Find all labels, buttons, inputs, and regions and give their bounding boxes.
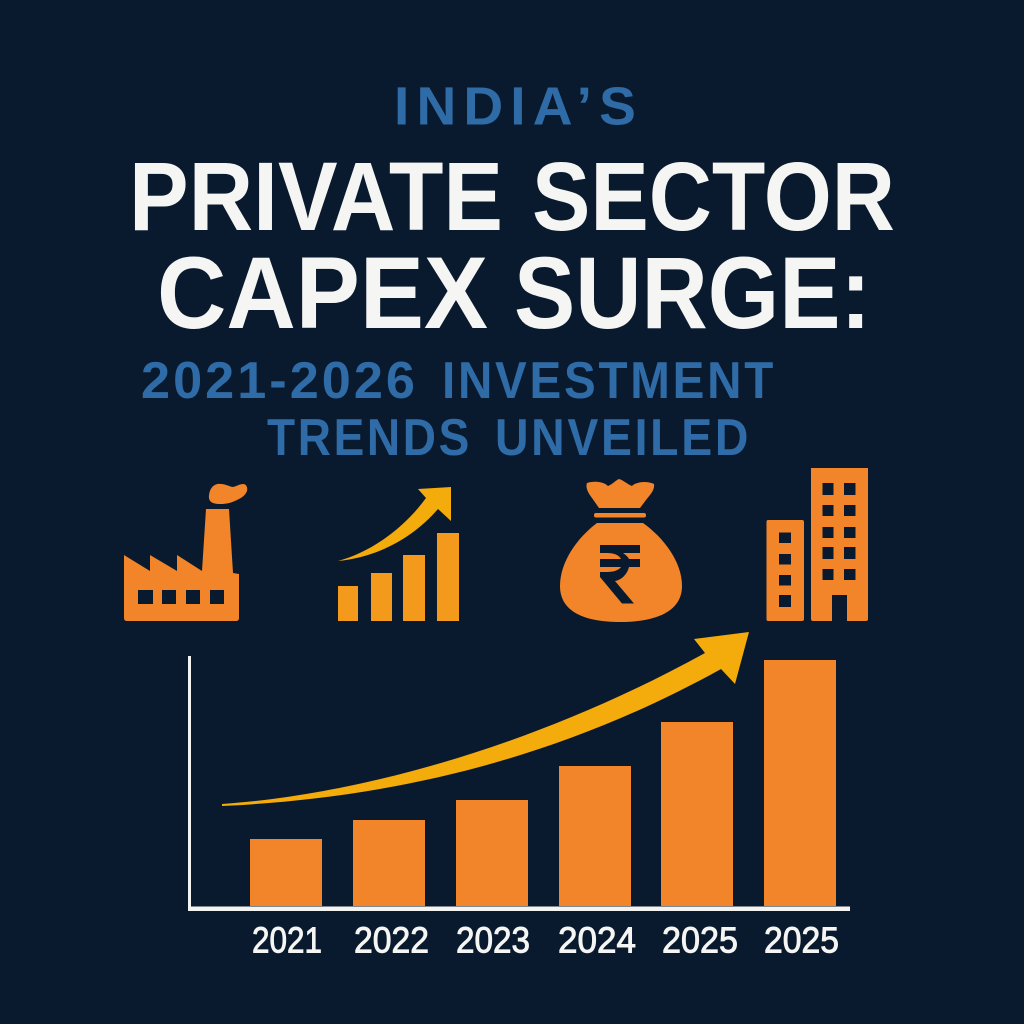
- heading line 2: CAPEX: [157, 236, 488, 350]
- kicker: India's: INDIA’S: [394, 76, 643, 136]
- heading line 2: [157, 236, 871, 350]
- icon: office buildings: [766, 468, 868, 621]
- bar chart: [188, 632, 850, 960]
- icon: money bag with rupee: [560, 479, 682, 622]
- heading line 1: SECTOR: [532, 142, 895, 251]
- chart axes: [188, 656, 850, 911]
- subtitle line 1: INVESTMENT: [442, 352, 776, 410]
- year labels: 2024: [558, 920, 636, 960]
- subtitle line 2: [267, 409, 751, 467]
- year labels: 2021: [252, 920, 322, 960]
- icon: factory: [124, 484, 247, 621]
- subtitle line 1: 2021-2026: [141, 352, 418, 410]
- subtitle line 2: UNVEILED: [495, 409, 751, 467]
- year labels: 2022: [354, 920, 429, 960]
- subtitle line 2: TRENDS: [267, 409, 472, 467]
- year labels: 2025: [764, 920, 839, 960]
- year labels: [252, 920, 839, 960]
- heading line 2: SURGE:: [514, 236, 871, 350]
- bars: [250, 660, 836, 906]
- heading line 1: PRIVATE: [129, 142, 503, 251]
- icon: growth bars with arrow: [338, 487, 459, 621]
- heading line 1: [129, 142, 895, 251]
- title block: [129, 76, 895, 467]
- subtitle line 1: [141, 352, 776, 410]
- year labels: 2025: [662, 920, 738, 960]
- trend arrow: [222, 632, 749, 806]
- year labels: 2023: [456, 920, 530, 960]
